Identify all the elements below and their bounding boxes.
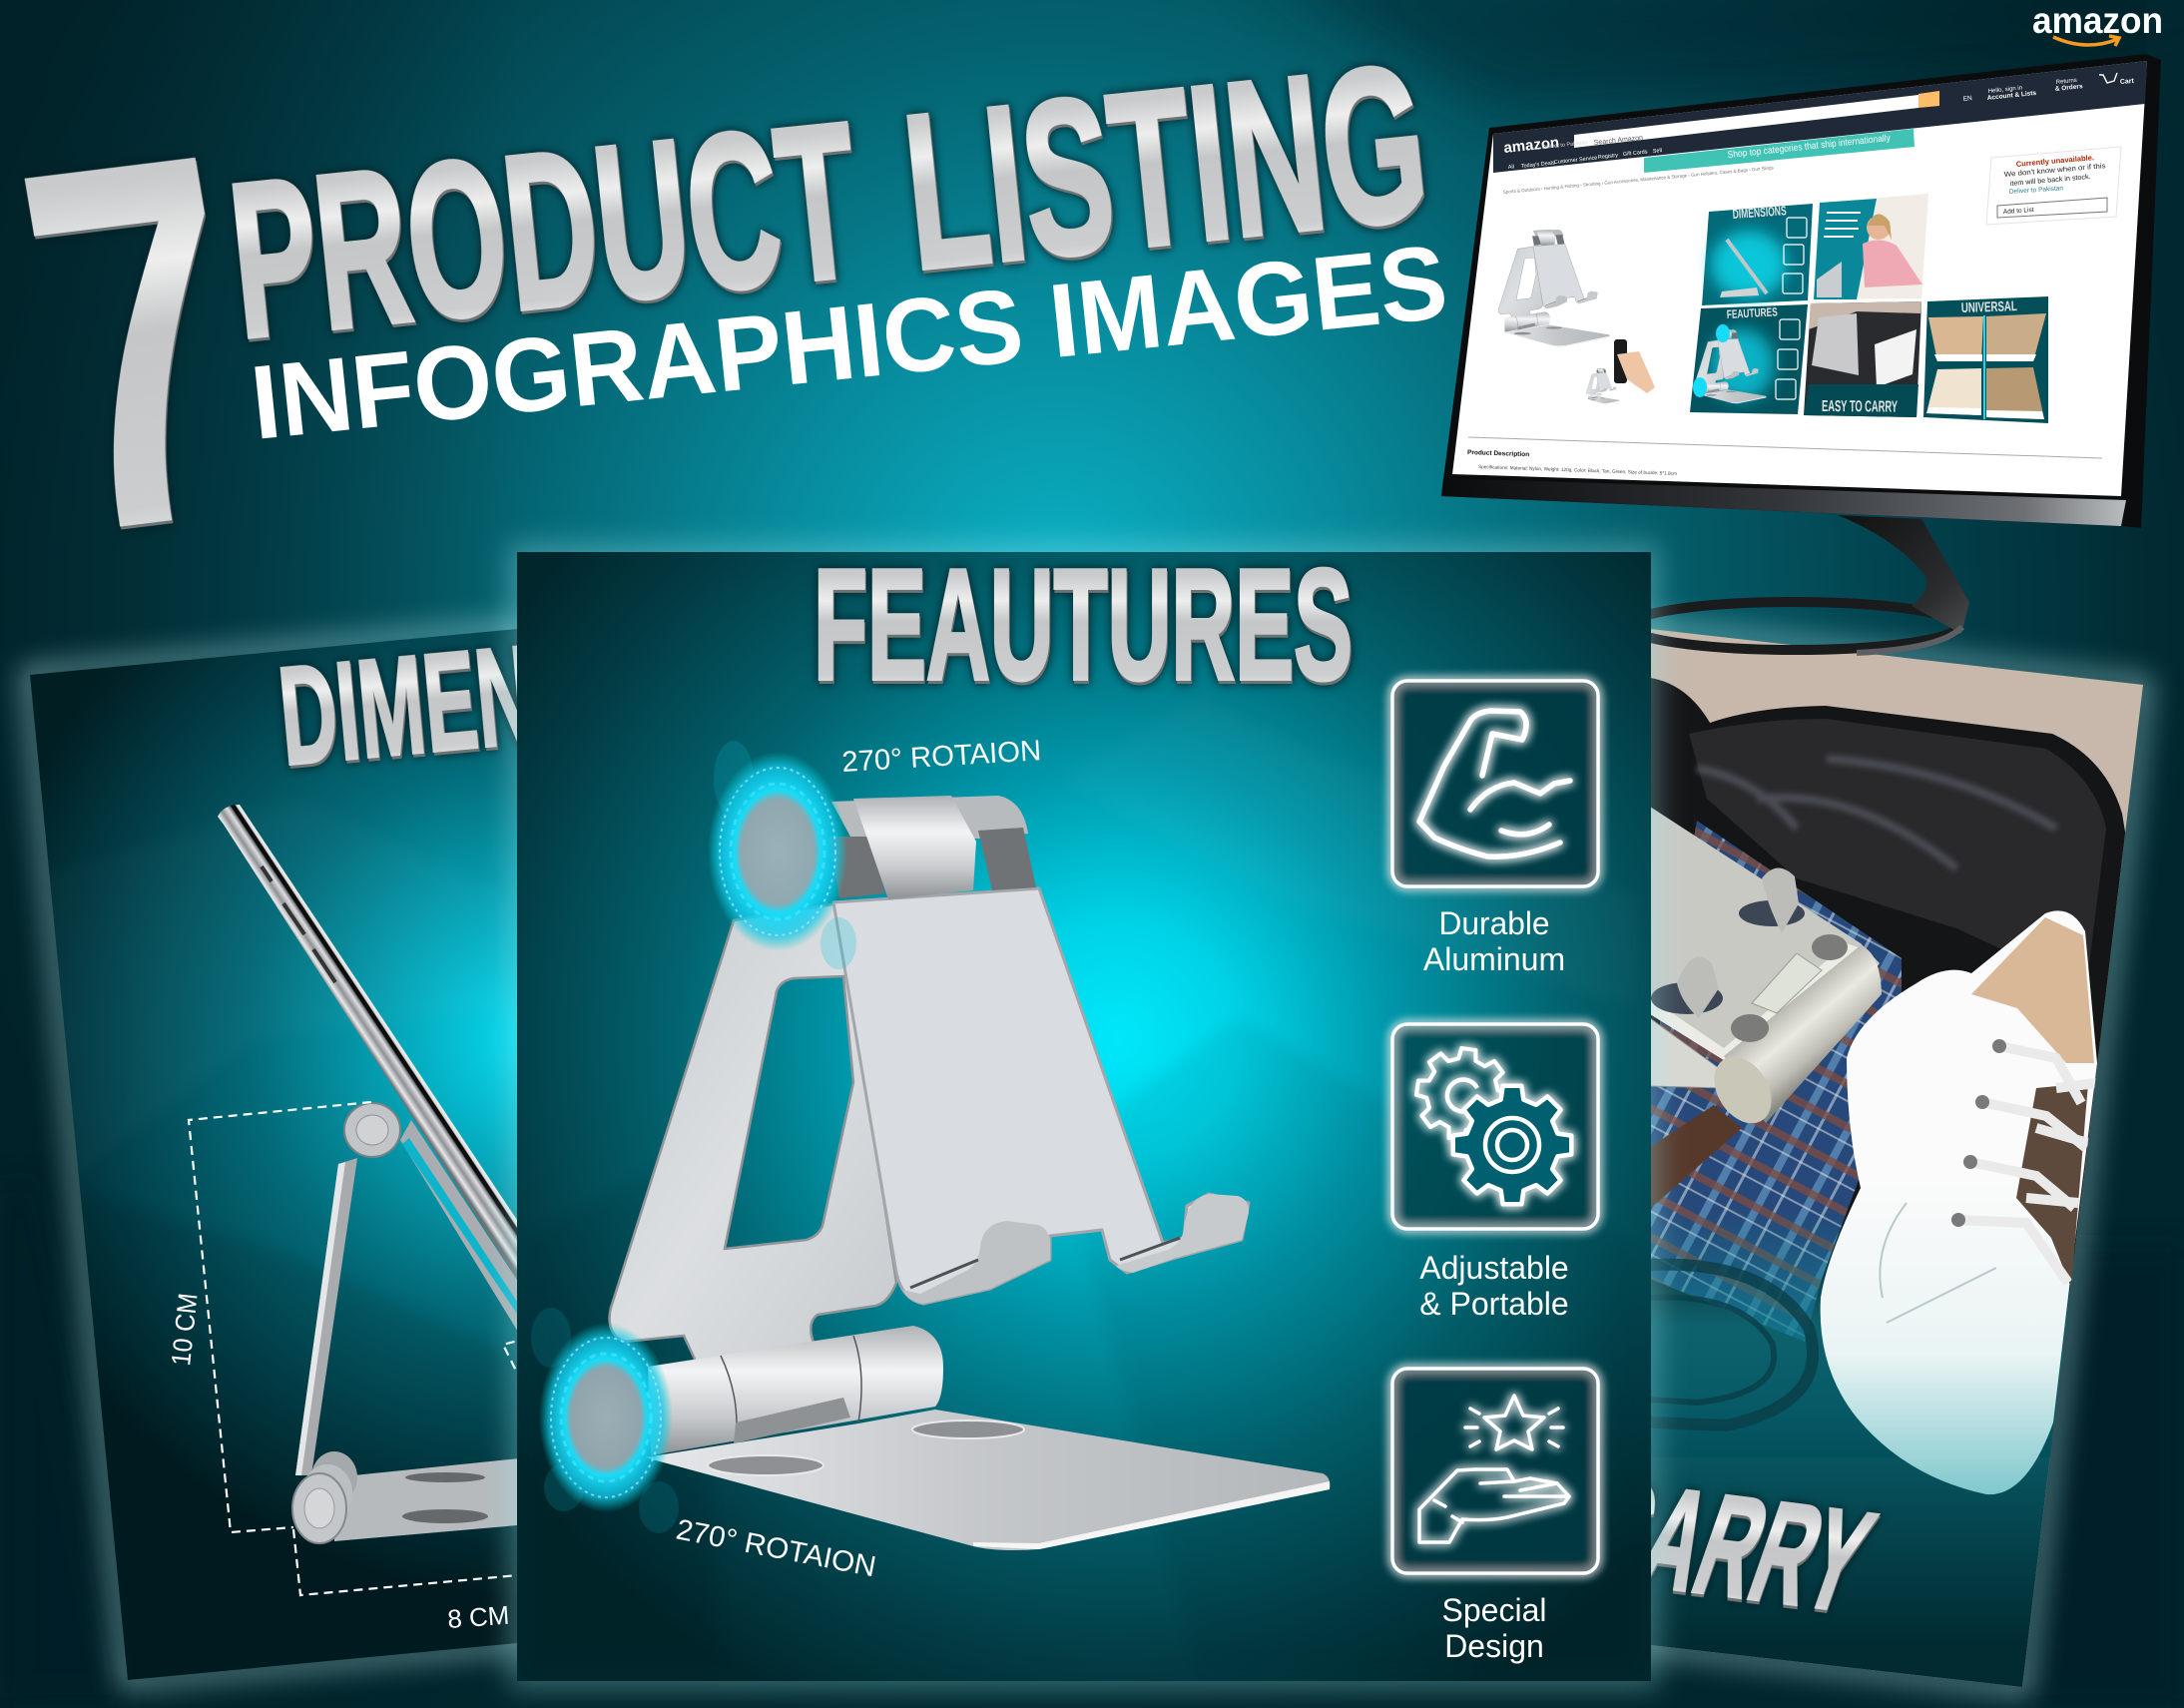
availability box: item will be back in stock.	[2009, 172, 2091, 188]
amazon nav bar: Registry	[1598, 153, 1619, 161]
product description	[1467, 437, 2102, 477]
amazon nav bar: amazon	[1503, 134, 1560, 157]
plaid shirt	[1650, 821, 1902, 1342]
text: adjustable and portable: Adjustable	[1419, 1250, 1569, 1286]
main product thumbnail	[1498, 230, 1610, 346]
shipping banner	[1644, 129, 1914, 173]
amazon nav bar: Today's Deals	[1521, 160, 1555, 170]
heading: FEAUTURES: FEAUTURES	[814, 537, 1353, 713]
amazon nav bar: Deliver to Pakistan	[1542, 140, 1588, 151]
availability box: Deliver to Pakistan	[2009, 185, 2064, 196]
thumbnail: easy to carry: EASY TO CARRY	[1822, 398, 1898, 416]
label: 10 CM: 10 CM	[166, 1292, 204, 1368]
height and width dashed guides	[189, 1102, 529, 1595]
side stand arm and joints	[292, 1103, 400, 1543]
phone side view	[218, 805, 529, 1298]
breadcrumb: Sports & Outdoors › Hunting & Fishing › Shooting › Gun Accessories, Maintenance & Storage › Gun Holsters, Cases & Bags › Gun Slings	[1503, 165, 1775, 195]
amazon nav bar: Account & Lists	[1986, 90, 2037, 102]
monitor stand	[1629, 515, 1969, 653]
stand illustration	[610, 796, 1330, 1550]
label: 8 CM: 8 CM	[446, 1600, 510, 1634]
thumbnail: easy to carry	[1804, 301, 1921, 417]
second product thumbnail with hand	[1586, 339, 1655, 403]
amazon nav bar: Customer Service	[1554, 155, 1598, 166]
amazon nav bar: Hello, sign in	[1988, 85, 2022, 95]
heading: DIMENSIONS: DIMENSIONS	[273, 593, 785, 795]
thumbnail: dimensions: DIMENSIONS	[1732, 203, 1787, 222]
back plate with cut-out	[610, 903, 896, 1368]
title: PRODUCT LISTING: PRODUCT	[221, 76, 868, 384]
rotation glow: top hinge	[708, 741, 856, 969]
side stand base	[334, 1457, 529, 1541]
camera strap ring	[1650, 1265, 1813, 1425]
amazon nav bar: All	[1508, 164, 1514, 171]
subtitle: INFOGRAPHICS IMAGES: INFOGRAPHICS IMAGES	[246, 224, 1452, 462]
availability box: Currently unavailable.	[2015, 153, 2094, 169]
bottom teal fade	[1651, 1216, 2078, 1687]
product description: Product Description	[1467, 449, 1529, 458]
product description: Specifications: Material: Nylon, Weight: 120g, Color: Black, Tan, Green, Size of buckle: 5*1.8cm	[1478, 464, 1677, 477]
icon: flexed arm	[1419, 711, 1570, 856]
label: top rotation: 270° ROTAION	[841, 735, 1042, 779]
panel: easy to carry	[1651, 605, 2168, 1708]
amazon nav bar: Returns	[2056, 78, 2077, 86]
amazon nav bar: Gift Cards	[1623, 149, 1648, 158]
feature: adjustable and portable	[1392, 1024, 1598, 1322]
bag	[1650, 678, 2136, 1457]
thumbnail: universal: UNIVERSAL	[1961, 297, 2017, 315]
availability box: We don't know when or if this	[2003, 161, 2106, 179]
thumbnail: universal	[1923, 296, 2048, 423]
bottom hinge	[648, 1326, 943, 1455]
monitor frame	[1441, 54, 2161, 528]
panel: dimensions	[5, 605, 517, 1705]
monitor screen	[1452, 61, 2147, 496]
feature: adjustable and portable: & Portable	[1419, 1286, 1569, 1322]
amazon nav bar: Search Amazon	[1593, 135, 1643, 147]
amazon nav bar: Cart	[2120, 78, 2135, 86]
top hinge	[828, 796, 1036, 899]
icon: star over hand	[1419, 1396, 1569, 1542]
thumbnail: features	[1690, 304, 1808, 414]
feature: special design: Design	[1444, 1628, 1544, 1664]
white sneaker	[1821, 910, 2097, 1494]
feature: durable aluminum: Aluminum	[1423, 941, 1565, 977]
belt	[1650, 1105, 1742, 1209]
availability box: Add to List	[2003, 207, 2034, 216]
thumbnail: features: FEAUTURES	[1726, 304, 1778, 321]
thumbnail: dimensions	[1702, 203, 1813, 305]
amazon nav bar: Sell	[1653, 148, 1662, 155]
monitor bezel	[1441, 478, 2126, 526]
amazon logo: amazon	[2032, 0, 2163, 41]
text: durable aluminum: Durable	[1439, 905, 1549, 941]
feature: durable aluminum	[1392, 681, 1598, 977]
shipping banner: Shop top categories that ship internationally	[1727, 133, 1892, 161]
front hooks	[902, 1194, 1249, 1304]
folded stand	[1650, 807, 1882, 1134]
thumbnail: person using stand	[1814, 194, 1928, 299]
amazon nav bar: & Orders	[2054, 83, 2083, 93]
monitor	[1441, 54, 2161, 653]
icon: gears	[1411, 1043, 1571, 1204]
rotation glow: bottom hinge	[531, 1308, 679, 1533]
feature: special design	[1392, 1369, 1598, 1664]
amazon nav bar: EN	[1962, 95, 1972, 103]
label: bottom rotation: 270° ROTAION	[674, 1513, 878, 1583]
amazon nav bar	[1493, 61, 2147, 173]
panel: features	[509, 537, 1659, 1688]
availability box	[1986, 147, 2121, 225]
brace arm of side stand	[400, 1120, 517, 1330]
text: special design: Special	[1442, 1592, 1546, 1628]
front plate	[833, 888, 1249, 1304]
base plate	[645, 1410, 1330, 1550]
